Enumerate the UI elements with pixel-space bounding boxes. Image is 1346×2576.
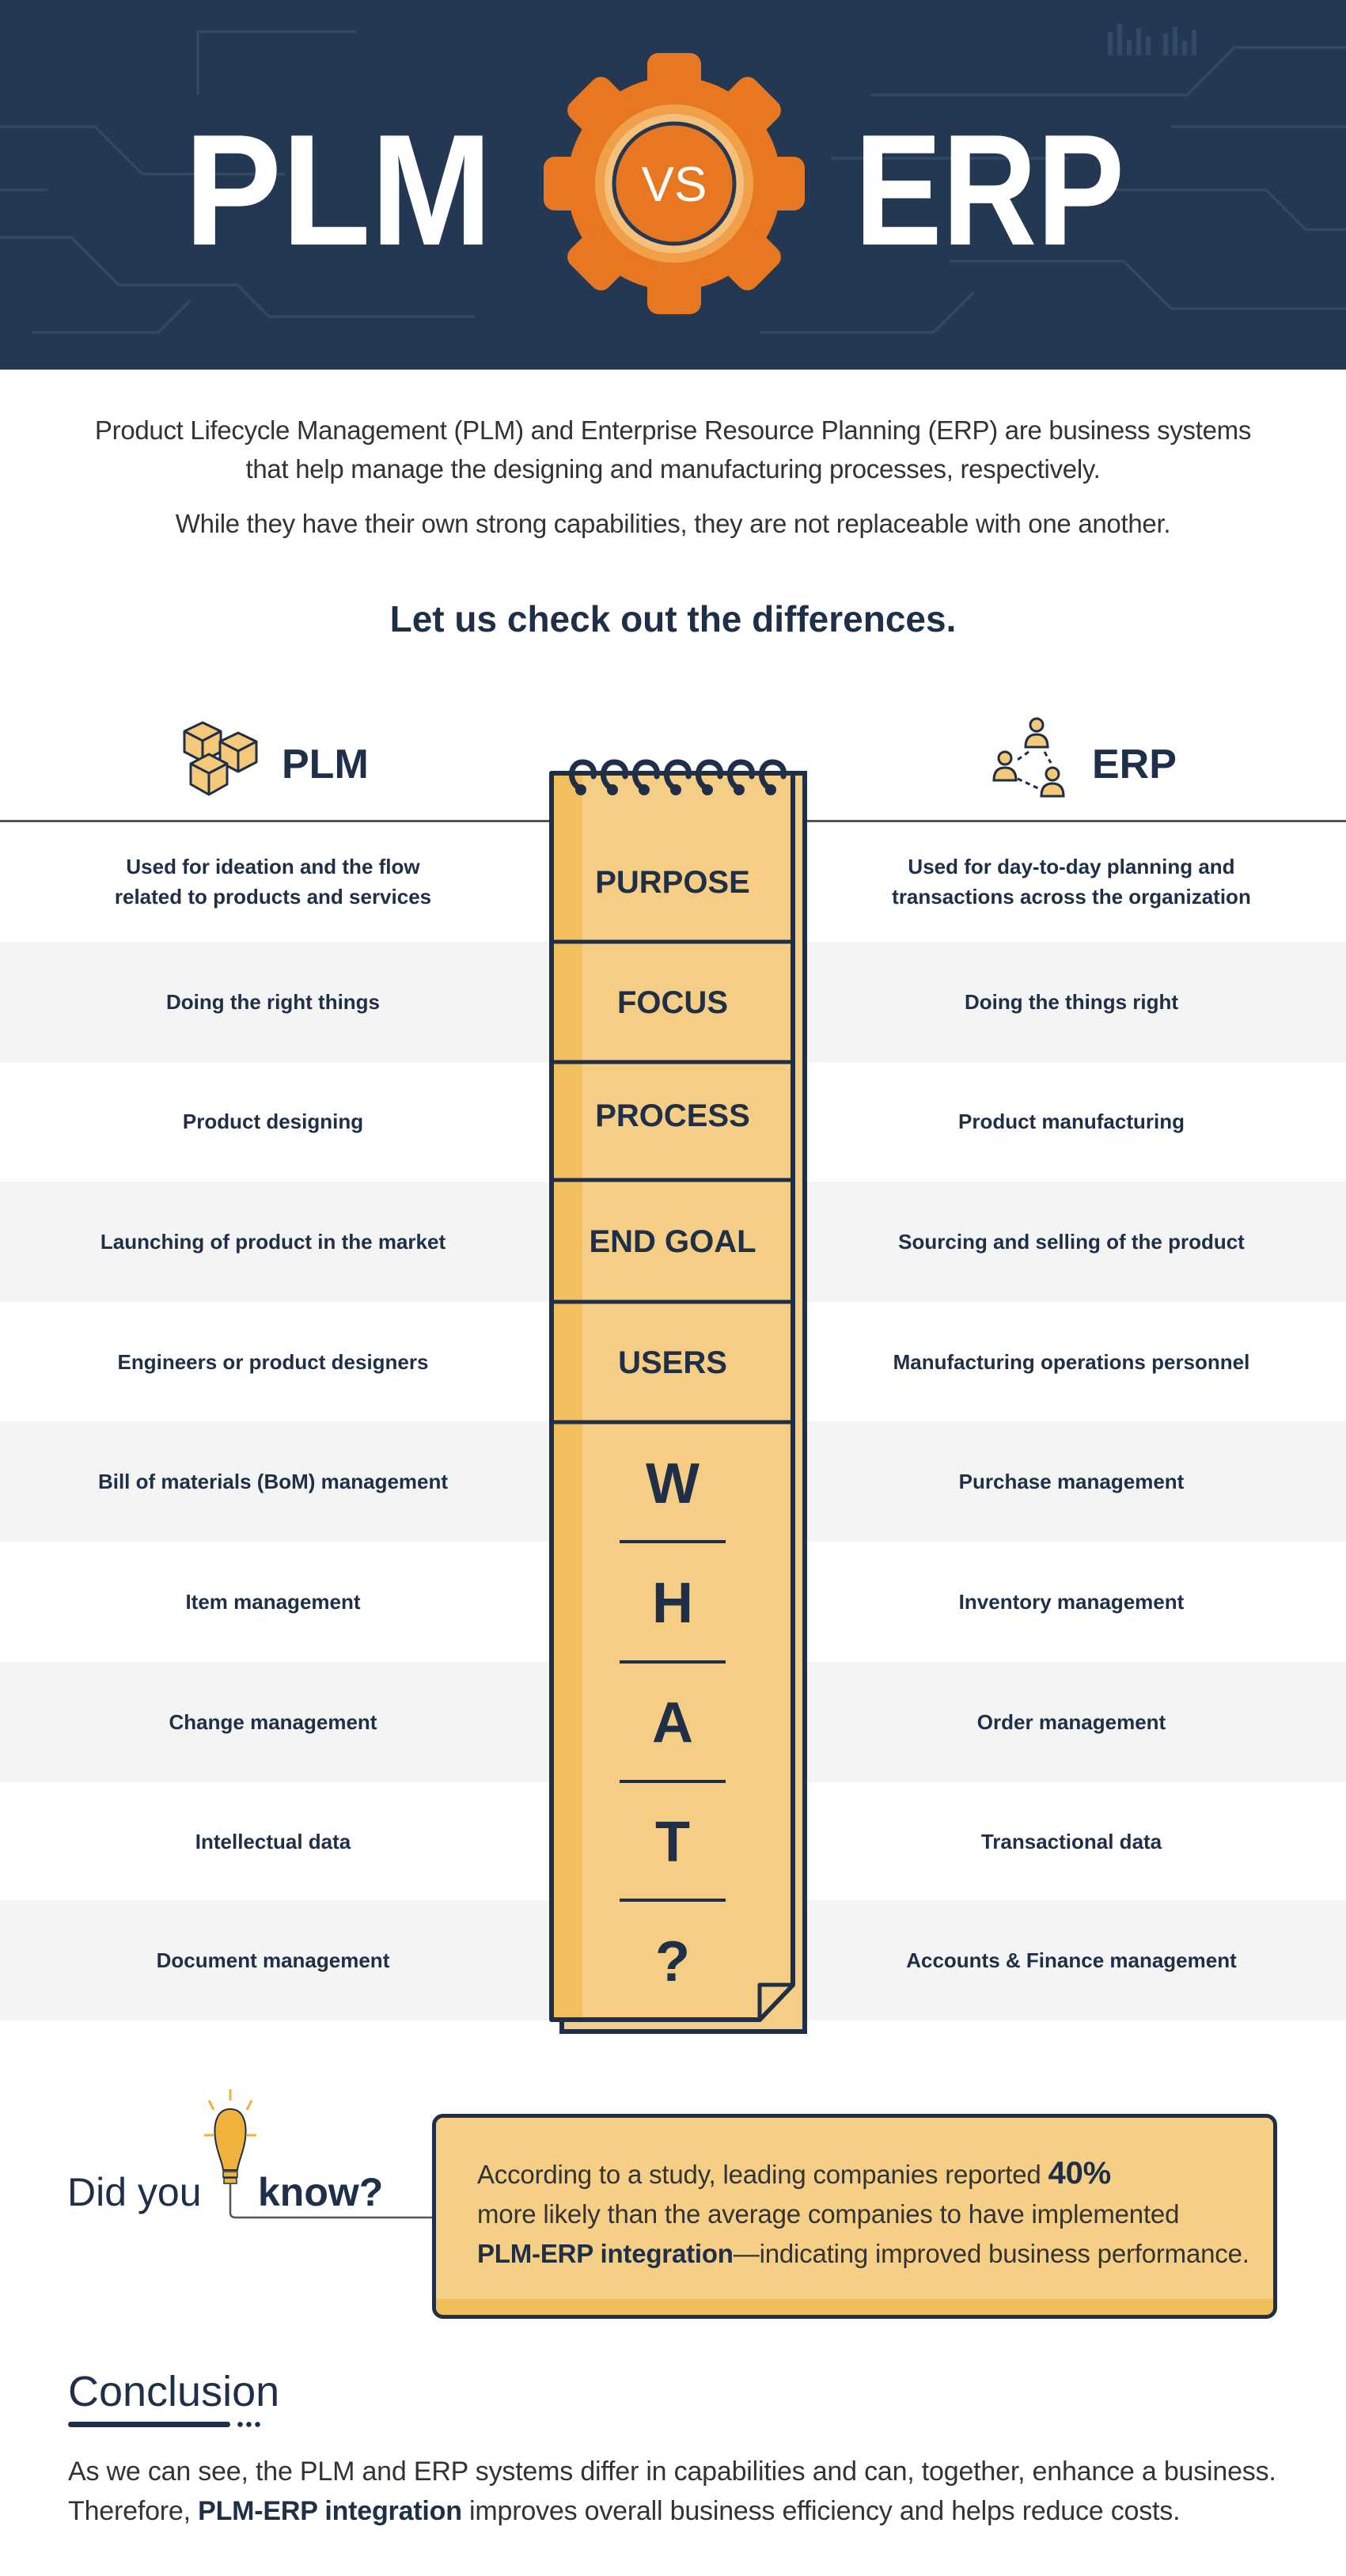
PLM column texts: Used for ideation and the flow [126,855,420,878]
notepad: categories: H [652,1572,693,1635]
PLM column texts: Document management [157,1948,389,1972]
PLM column texts: Doing the right things [166,990,380,1014]
ERP column texts: Used for day-to-day planning and [908,855,1235,878]
icon: gear VS: VS [642,157,707,212]
did you know heading with bulb: Did you [67,2170,202,2214]
PLM column texts: Change management [169,1710,377,1734]
ERP column texts [892,855,1251,1972]
comparison table rows [0,942,1346,2020]
PLM column texts: Intellectual data [195,1830,351,1853]
divider line [0,820,1346,822]
intro text: that help manage the designing and manufacturing processes, respectively. [245,454,1100,484]
PLM column texts: Item management [185,1590,361,1614]
conclusion text [68,2456,1276,2526]
ERP column texts: Inventory management [959,1590,1184,1614]
callout: 40% fact: more likely than the average companies to have implemented [477,2199,1179,2229]
intro text: While they have their own strong capabilities, they are not replaceable with one another. [176,509,1170,538]
conclusion text: As we can see, the PLM and ERP systems differ in capabilities and can, together, enhance a business. [68,2456,1276,2487]
notepad: categories [549,760,807,2034]
ERP column texts: transactions across the organization [892,885,1251,909]
notepad: categories: W [646,1452,700,1516]
callout: 40% fact [432,2114,1277,2319]
ERP column texts: Transactional data [981,1830,1162,1853]
notepad: categories: A [652,1691,693,1755]
PLM column texts: related to products and services [115,885,431,909]
notepad: categories: PURPOSE [595,865,750,900]
did you know heading with bulb [67,2089,432,2219]
notepad: categories: END GOAL [589,1224,756,1259]
ERP column texts: Sourcing and selling of the product [898,1230,1245,1254]
notepad: categories: PROCESS [595,1098,750,1133]
icon: gear VS [544,53,805,314]
did you know heading with bulb: know? [258,2170,383,2214]
header banner [0,0,1346,370]
PLM column texts: Engineers or product designers [117,1350,428,1374]
label: ERP: ERP [1092,742,1177,787]
spiral rings [571,762,783,787]
ERP column texts: Doing the things right [965,990,1178,1014]
label: PLM: PLM [282,742,369,787]
ERP column texts: Purchase management [959,1470,1184,1493]
conclusion heading: Conclusion [68,2368,279,2415]
PLM column texts: Product designing [183,1110,363,1133]
PLM column texts: Bill of materials (BoM) management [98,1470,448,1493]
notepad: categories: FOCUS [617,985,728,1020]
PLM column texts [98,855,448,1972]
PLM column texts: Launching of product in the market [100,1230,446,1254]
subheading: Let us check out the differences. [390,598,956,639]
icon: people network [992,717,1065,798]
notepad: categories: ? [655,1930,690,1994]
conclusion text: Therefore, PLM-ERP integration improves overall business efficiency and helps reduce costs. [68,2496,1180,2526]
icon: cubes [184,722,258,796]
ERP column header [992,717,1177,798]
callout: 40% fact: According to a study, leading companies reported 40% [477,2156,1111,2191]
PLM column header [184,722,369,796]
title: ERP: ERP [855,102,1124,279]
ERP column texts: Product manufacturing [958,1110,1185,1133]
ERP column texts: Manufacturing operations personnel [893,1350,1249,1374]
callout: 40% fact: PLM-ERP integration—indicating improved business performance. [477,2239,1249,2268]
notepad: categories: T [655,1811,690,1874]
title: PLM: PLM [184,102,492,279]
ERP column texts: Order management [977,1710,1166,1734]
notepad: categories: USERS [618,1345,727,1380]
ERP column texts: Accounts & Finance management [906,1948,1237,1972]
intro text [95,415,1251,538]
intro text: Product Lifecycle Management (PLM) and Enterprise Resource Planning (ERP) are business systems [95,415,1251,445]
